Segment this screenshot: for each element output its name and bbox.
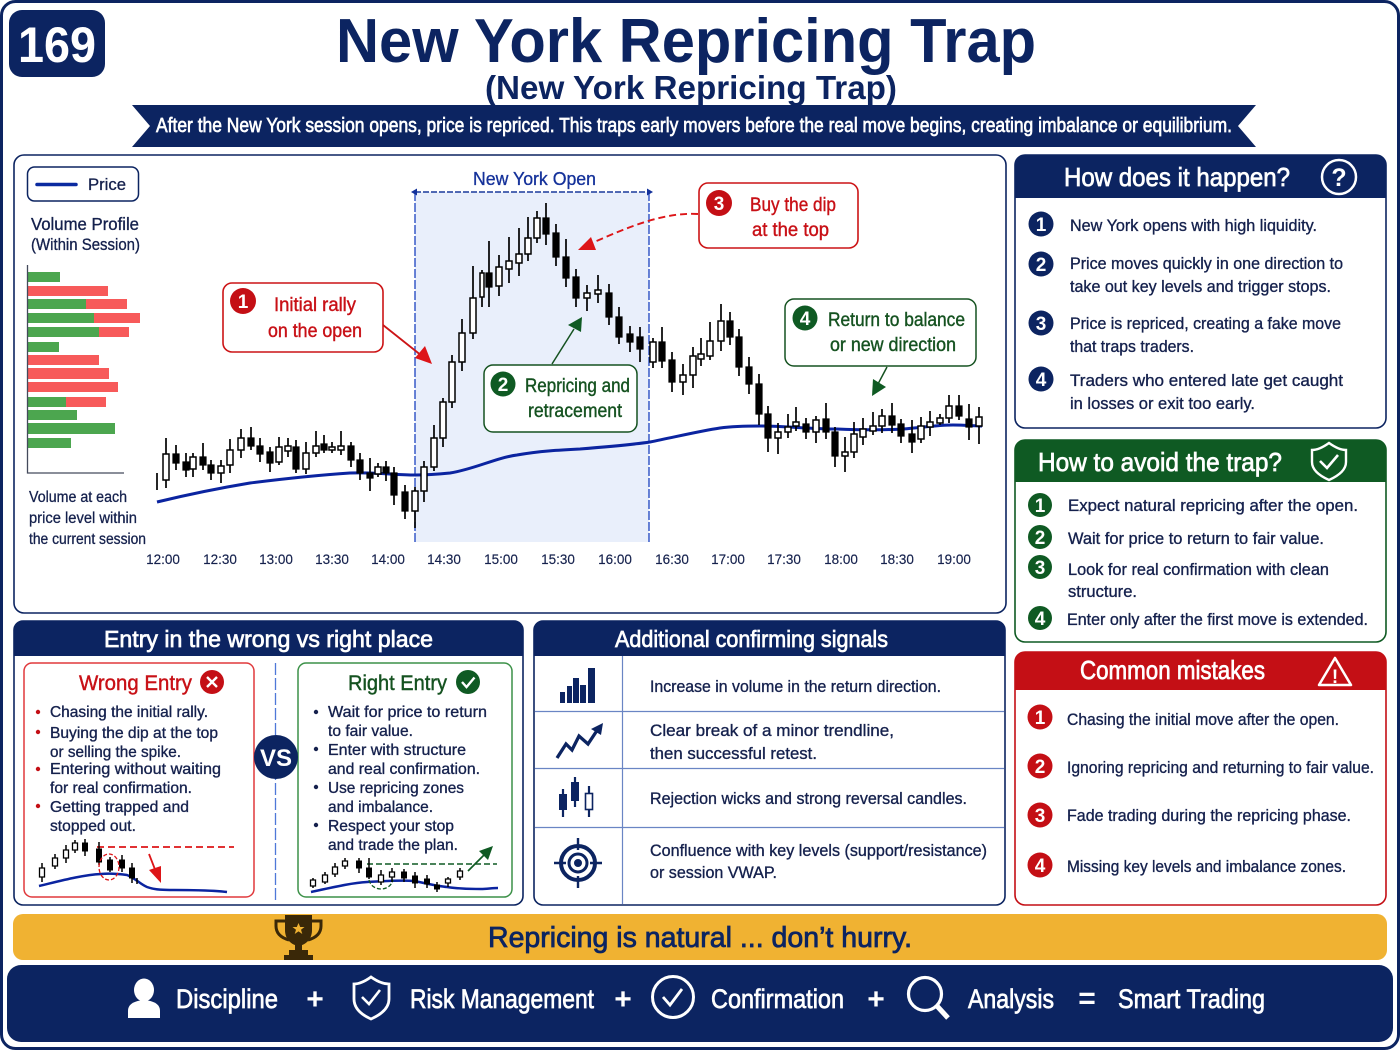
box: wrong entry: or selling the spike. (50, 744, 181, 761)
box: wrong entry: Getting trapped and (50, 799, 189, 816)
x axis labels: 14:30 (427, 552, 461, 567)
icon: person (128, 978, 160, 1018)
step 2 (1028, 252, 1343, 296)
callout 1: initial rally: 1 (238, 292, 249, 313)
box: right entry: Enter with structure (328, 742, 466, 759)
box: right entry: Use repricing zones (328, 780, 464, 797)
heading: volume profile: Volume Profile (31, 214, 139, 234)
tip 3: structure. (1068, 582, 1137, 601)
legend: price (28, 167, 138, 201)
title: New York Repricing Trap (336, 7, 1036, 76)
callout 3: buy the dip at the top (699, 183, 858, 248)
callout 2: repricing and retracement: Repricing and (525, 375, 630, 397)
x axis labels: 18:30 (880, 552, 914, 567)
footer bar: smart trading formula: Risk Management (410, 984, 594, 1014)
box: right entry: and trade the plan. (328, 837, 458, 854)
x axis labels: 17:00 (711, 552, 745, 567)
banner: key message: Repricing is natural ... don’t hurry. (488, 922, 912, 954)
text: volume profile note (29, 489, 146, 548)
mistake 3: 3 (1035, 806, 1045, 827)
mistake 3: Fade trading during the repricing phase. (1067, 806, 1351, 825)
tip 1: Expect natural repricing after the open. (1068, 496, 1358, 515)
mistake 1 (1028, 704, 1339, 730)
callout 3: buy the dip at the top: at the top (752, 219, 829, 241)
callout 2: repricing and retracement (484, 365, 637, 432)
x axis labels: 16:30 (655, 552, 689, 567)
arrow: callout 4 (872, 367, 887, 396)
x axis labels: 15:00 (484, 552, 518, 567)
header: how does it happen (1015, 155, 1386, 198)
tip 1 (1028, 493, 1358, 517)
mistake 1: Chasing the initial move after the open. (1067, 710, 1339, 729)
x axis labels: 19:00 (937, 552, 971, 567)
mistake 4: Missing key levels and imbalance zones. (1067, 857, 1346, 876)
mini chart: right entry (310, 846, 498, 892)
step 4: in losses or exit too early. (1070, 394, 1255, 413)
mistake 2 (1028, 754, 1374, 778)
step 3 (1028, 310, 1341, 356)
tip 1: 1 (1035, 496, 1046, 517)
banner: key message (13, 914, 1387, 960)
text: signal 3: Rejection wicks and strong reversal candles. (650, 789, 967, 808)
footer bar: smart trading formula: Confirmation (711, 984, 844, 1014)
box: right entry (298, 663, 512, 897)
mistake 2: 2 (1035, 757, 1045, 778)
step 4: 4 (1036, 370, 1047, 391)
mini chart: wrong entry (39, 839, 234, 892)
legend: price: Price (88, 175, 126, 194)
panel: how to avoid the trap (1015, 440, 1386, 642)
step 2: 2 (1036, 255, 1046, 276)
tip 3: 3 (1035, 558, 1045, 579)
x axis labels: 12:00 (146, 552, 180, 567)
x axis labels: 13:00 (259, 552, 293, 567)
mistake 3 (1028, 802, 1351, 828)
chart: candlesticks (157, 203, 982, 528)
zone: New York Open (411, 169, 653, 542)
badge: VS (254, 735, 298, 779)
box: wrong entry: Chasing the initial rally. (50, 704, 208, 721)
header: entry wrong vs right: Entry in the wrong vs right place (104, 626, 433, 652)
mistake 4: 4 (1035, 856, 1046, 877)
text: signal 2: then successful retest. (650, 744, 817, 763)
mistake 2: Ignoring repricing and returning to fair value. (1067, 758, 1374, 777)
icon: trophy (276, 915, 321, 960)
x axis labels: 14:00 (371, 552, 405, 567)
text: signal 4 (650, 841, 987, 882)
text: signal 1: Increase in volume in the return direction. (650, 677, 941, 696)
callout 1: initial rally: on the open (268, 320, 362, 342)
x axis labels (146, 552, 971, 567)
icon: trendline arrow (557, 723, 603, 758)
header: common mistakes (1015, 652, 1386, 690)
chart: volume profile bars (28, 265, 140, 473)
panel: entry wrong vs right (14, 621, 523, 905)
header: common mistakes: ! (1332, 667, 1338, 688)
tip 4: 4 (1035, 609, 1046, 630)
callout 3: buy the dip at the top: 3 (714, 194, 724, 215)
arrow: callout 3 (578, 214, 698, 250)
step 3: that traps traders. (1070, 337, 1194, 356)
tip 2: 2 (1035, 528, 1045, 549)
box: wrong entry: Entering without waiting (50, 761, 221, 778)
panel: additional confirming signals (534, 621, 1005, 905)
callout 2: repricing and retracement: 2 (498, 375, 508, 396)
panel: price chart (14, 155, 1006, 613)
footer bar: smart trading formula (7, 965, 1393, 1042)
tip 3 (1028, 555, 1329, 601)
mistake 1: 1 (1035, 708, 1046, 729)
footer bar: smart trading formula: Discipline (176, 984, 278, 1014)
badge: VS: VS (260, 745, 292, 772)
step 3: Price is repriced, creating a fake move (1070, 314, 1341, 333)
tip 4 (1028, 606, 1368, 630)
tip 4: Enter only after the first move is extended. (1067, 610, 1368, 629)
tip 3: Look for real confirmation with clean (1068, 560, 1329, 579)
icon: shield (354, 977, 389, 1019)
box: right entry: Respect your stop (328, 818, 454, 835)
step 2: Price moves quickly in one direction to (1070, 254, 1343, 273)
tip 2 (1028, 525, 1324, 549)
box: wrong entry (24, 663, 254, 897)
box: wrong entry: Wrong Entry (79, 672, 192, 695)
x axis labels: 15:30 (541, 552, 575, 567)
footer bar: smart trading formula: Smart Trading (1118, 984, 1265, 1014)
header: additional confirming signals (534, 621, 1005, 656)
step 4 (1028, 366, 1343, 413)
x axis labels: 12:30 (203, 552, 237, 567)
box: right entry: to fair value. (328, 723, 413, 740)
text: signal 2 (650, 721, 894, 763)
header: additional confirming signals: Additional confirming signals (615, 626, 888, 652)
text: volume profile note: price level within (29, 510, 137, 527)
icon: magnifier (908, 978, 948, 1018)
step 1 (1028, 212, 1317, 236)
text: signal 4: Confluence with key levels (support/resistance) (650, 841, 987, 860)
header: how to avoid the trap (1015, 440, 1386, 482)
text: signal 4: or session VWAP. (650, 863, 777, 882)
callout 3: buy the dip at the top: Buy the dip (750, 194, 836, 216)
header: how to avoid the trap: How to avoid the trap? (1038, 447, 1282, 477)
box: wrong entry: Buying the dip at the top (50, 725, 218, 742)
callout 2: repricing and retracement: retracement (528, 400, 623, 422)
tip 2: Wait for price to return to fair value. (1068, 529, 1324, 548)
callout 1: initial rally: Initial rally (274, 294, 356, 316)
step 1: 1 (1036, 215, 1047, 236)
icon: candles (559, 777, 592, 817)
text: signal 2: Clear break of a minor trendline, (650, 721, 894, 740)
footer bar: smart trading formula: + (867, 983, 885, 1016)
x axis labels: 16:00 (598, 552, 632, 567)
header: how does it happen: How does it happen? (1064, 162, 1290, 192)
callout 4: return to balance (785, 299, 976, 366)
zone: New York Open: New York Open (473, 169, 596, 189)
badge: 169: 169 (18, 17, 96, 73)
x axis labels: 13:30 (315, 552, 349, 567)
icon: check circle (652, 976, 694, 1018)
callout 1: initial rally (223, 283, 383, 352)
ribbon: description: After the New York session opens, price is repriced. This traps early movers before the real move begins, creating imbalance or equilibrium. (156, 115, 1232, 137)
subtitle: (New York Repricing Trap) (485, 69, 897, 106)
x axis labels: 17:30 (767, 552, 801, 567)
text: volume profile note: the current session (29, 531, 146, 548)
ribbon: description (132, 105, 1256, 147)
panel: common mistakes (1015, 652, 1386, 905)
callout 4: return to balance: 4 (800, 309, 811, 330)
mistake 4 (1028, 852, 1346, 878)
arrow: callout 2 (552, 317, 582, 364)
x axis labels: 18:00 (824, 552, 858, 567)
footer bar: smart trading formula: + (306, 983, 324, 1016)
footer bar: smart trading formula: = (1078, 982, 1096, 1015)
text: volume profile note: Volume at each (29, 489, 127, 506)
line: price average (157, 425, 982, 502)
panel: how does it happen (1015, 155, 1386, 428)
step 2: take out key levels and trigger stops. (1070, 277, 1331, 296)
callout 4: return to balance: Return to balance (828, 309, 965, 331)
icon: target (554, 838, 602, 888)
footer bar: smart trading formula: Analysis (968, 984, 1054, 1014)
step 3: 3 (1036, 314, 1046, 335)
box: right entry: Right Entry (348, 672, 447, 695)
arrow: callout 1 (383, 325, 432, 364)
box: right entry: and real confirmation. (328, 761, 480, 778)
box: wrong entry: for real confirmation. (50, 780, 192, 797)
icon: volume bars (560, 668, 595, 703)
box: right entry: Wait for price to return (328, 704, 487, 721)
footer bar: smart trading formula: + (614, 983, 632, 1016)
header: entry wrong vs right (14, 621, 523, 656)
callout 4: return to balance: or new direction (830, 334, 956, 356)
heading: volume profile: (Within Session) (31, 235, 140, 254)
box: right entry: and imbalance. (328, 799, 433, 816)
heading: volume profile (31, 214, 140, 254)
box: wrong entry: stopped out. (50, 818, 136, 835)
header: how does it happen: ? (1331, 164, 1347, 192)
step 4: Traders who entered late get caught (1070, 371, 1343, 390)
step 1: New York opens with high liquidity. (1070, 216, 1317, 235)
header: common mistakes: Common mistakes (1080, 655, 1265, 685)
